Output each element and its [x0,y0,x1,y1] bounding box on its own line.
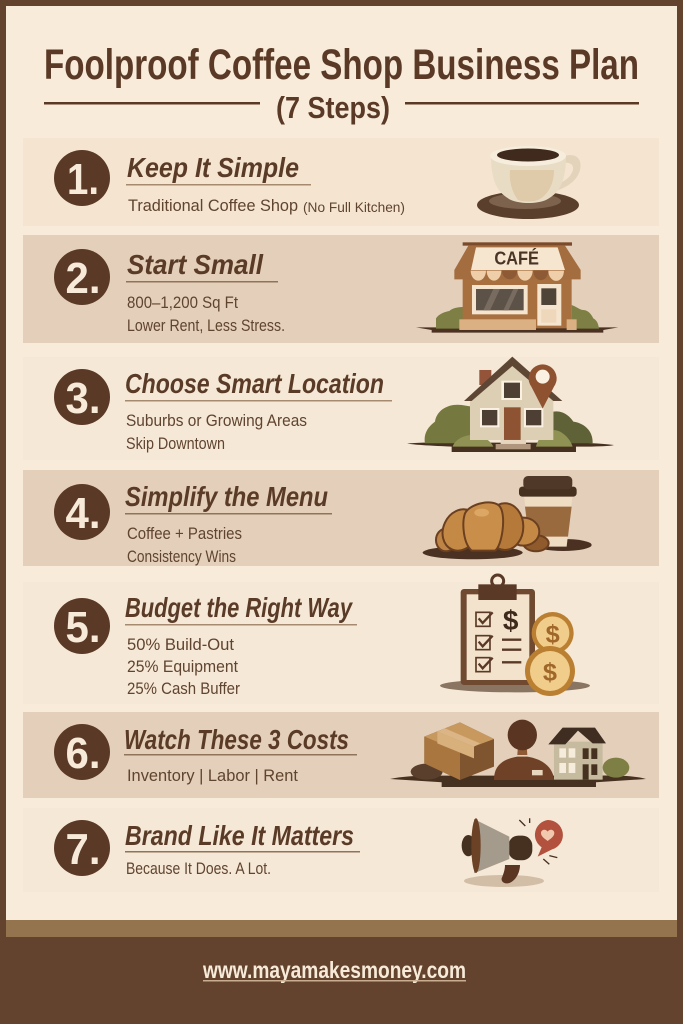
panel: step 5: 50% Build-Out [127,635,234,654]
panel: step 3 [23,357,659,460]
panel: step 6: Inventory | Labor | Rent [127,766,298,785]
panel: step 2: 2. [66,254,100,303]
panel: step 5: 5. [66,603,100,652]
icon: cafe storefront [416,242,618,333]
icon: budget clipboard and coins: $ [546,620,560,648]
panel: step 3: Suburbs or Growing Areas [126,411,307,430]
panel: step 7: Brand Like It Matters [125,820,354,851]
panel: step 1: (No Full Kitchen) [303,199,405,215]
panel: step 5: 25% Equipment [127,657,238,676]
panel: step 2: Lower Rent, Less Stress. [127,316,285,335]
icon: budget clipboard and coins: $ [543,658,557,686]
panel: step 4 [23,470,659,566]
panel: step 3: Skip Downtown [126,434,225,453]
icon: box, worker and house [390,720,646,787]
panel: step 2 [23,235,659,343]
panel: step 6 [23,712,659,798]
icon: budget clipboard and coins: $ [503,605,519,636]
footer website: www.mayamakesmoney.com [202,957,466,983]
panel: step 4: 4. [66,489,100,538]
icon: house with map pin [407,357,614,452]
panel: step 7: 7. [66,825,100,874]
panel: step 2: Start Small [127,249,264,280]
panel: step 5 [23,575,659,704]
icon: budget clipboard and coins [440,575,590,696]
panel: step 2: 800–1,200 Sq Ft [127,293,238,312]
panel: step 7 [23,808,659,892]
subtitle: (7 Steps) [276,90,390,125]
icon: cafe storefront: CAFÉ [494,248,539,269]
panel: step 1: Keep It Simple [127,152,299,183]
panel: step 4: Consistency Wins [127,547,236,566]
panel: step 3: Choose Smart Location [125,368,384,399]
panel: step 6: Watch These 3 Costs [124,724,349,755]
panel: step 4: Coffee + Pastries [127,524,242,543]
panel: step 1 [23,138,659,226]
panel: step 4: Simplify the Menu [125,481,328,512]
panel: step 5: 25% Cash Buffer [127,679,240,698]
icon: croissant and coffee cup [423,476,592,559]
panel: step 3: 3. [66,374,100,423]
panel: step 1: 1. [67,155,99,204]
icon: megaphone with heart bubble [462,818,563,887]
panel: step 5: Budget the Right Way [125,592,353,623]
panel: step 6: 6. [66,729,100,778]
bottom strip [6,920,677,937]
panel: step 7: Because It Does. A Lot. [126,859,271,878]
icon: coffee cup [477,146,581,219]
panel: step 1: Traditional Coffee Shop [128,196,298,215]
